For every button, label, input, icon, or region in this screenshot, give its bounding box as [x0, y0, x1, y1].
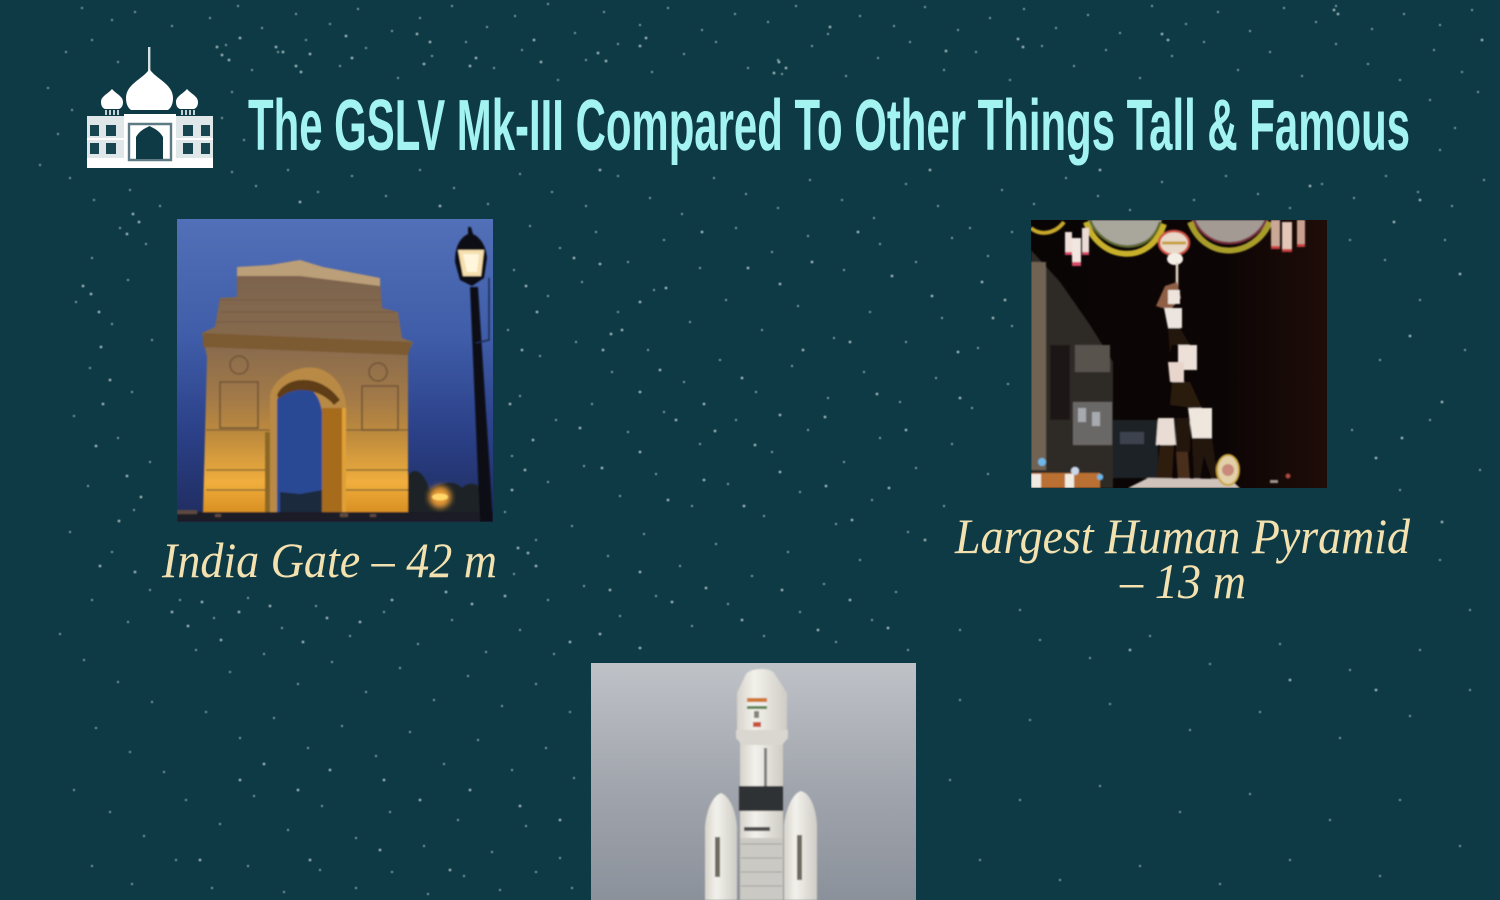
human tower — [1128, 262, 1240, 488]
photo: India Gate — [177, 219, 493, 522]
caption: India Gate: India Gate – 42 m — [161, 532, 497, 588]
crowd — [177, 512, 493, 522]
photo: GSLV Mk-III rocket — [591, 663, 916, 900]
garlands — [1088, 220, 1162, 246]
trees and distant glow — [407, 470, 480, 512]
dahi handi pot — [1159, 231, 1189, 255]
gate monument — [202, 260, 413, 513]
flag and markings — [747, 698, 767, 702]
street lamp — [455, 227, 493, 522]
payload fairing — [737, 669, 787, 730]
caption: human pyramid: – 13 m — [1119, 553, 1246, 609]
buildings — [1031, 250, 1113, 488]
photo: human pyramid — [1031, 220, 1327, 488]
core stage — [739, 743, 784, 839]
title icon: Taj Mahal — [87, 47, 213, 168]
caption: human pyramid — [954, 508, 1411, 609]
left booster — [705, 793, 737, 900]
caption: human pyramid: Largest Human Pyramid — [954, 508, 1411, 564]
right booster — [784, 791, 817, 900]
